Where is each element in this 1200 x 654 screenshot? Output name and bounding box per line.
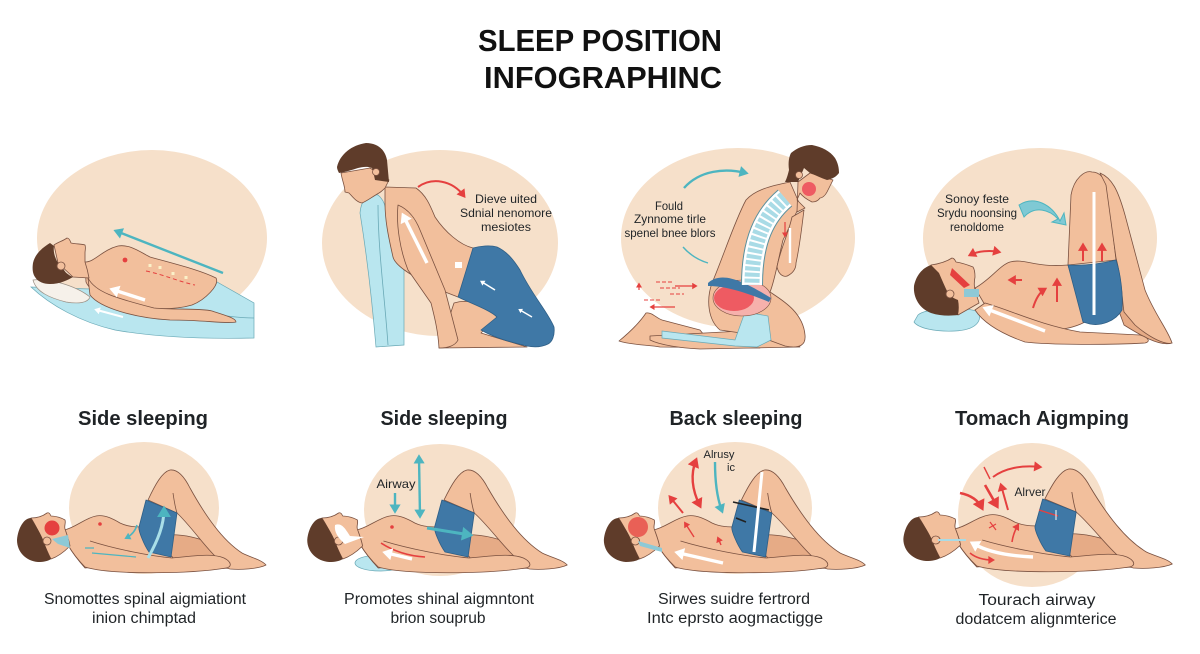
label: airway: Alrver [1014,485,1046,499]
caption 1: inion chimptad [92,610,196,627]
panel: bottom illustration 4 [903,443,1172,587]
heading: side sleeping 1: Side sleeping [78,408,208,430]
label: spinal note [460,192,552,234]
arrow: red curve [418,181,464,196]
label: spinal note: Fould [655,199,683,213]
caption 4: Tourach airway [978,592,1096,609]
panel: bottom illustration 2 [307,444,567,576]
title: INFOGRAPHINC [484,60,722,95]
arrows: red [670,460,721,545]
arrow: teal curves [684,171,746,188]
caption 2 [344,591,535,627]
heading: stomach: Tomach Aigmping [955,408,1129,430]
arrows: red [970,245,1102,308]
arrow: teal up-back [116,231,223,273]
label: airway: Airway [376,477,416,491]
caption 4: dodatcem alignmterice [956,611,1116,628]
arrow: white shoulder [987,309,1045,331]
title [478,23,722,95]
panel: bottom illustration 1 [17,442,266,574]
caption 3: Intc eprsto aogmactigge [647,610,823,627]
title: SLEEP POSITION [478,23,722,58]
caption 2: Promotes shinal aigmntont [344,591,535,608]
arrow: white torso [404,217,427,263]
label: spinal note: renoldome [950,220,1004,234]
caption 3: Sirwes suidre fertrord [658,591,810,608]
caption 3 [647,591,823,627]
label: spinal note: spenel bnee blors [624,226,716,240]
label: spinal note [624,199,716,240]
label: spinal note: Dieve uited [475,192,537,206]
panel: top illustration 2, leaning on board [322,143,558,348]
arrow: white [679,553,723,563]
arrow: white [974,544,1033,557]
caption 2: brion souprub [390,610,486,627]
panel: top illustration 3, kneeling with spine [619,145,855,349]
caption 4 [956,592,1116,628]
label: spinal note: Sdnial nenomore [460,206,552,220]
label: spinal note [937,192,1017,234]
arrow: white arm [114,290,145,300]
label: spinal note: Sonoy feste [945,192,1009,206]
arrows: small red [639,282,696,307]
label: airway: Alrusy [704,449,735,461]
label: spinal note: Zynnome tirle [634,212,706,226]
arrow: teal [715,462,722,511]
arrows: red [960,466,1040,560]
label: airway: ic [727,462,735,474]
panel: top illustration 1, lying on mat [31,150,267,338]
heading: side sleeping 2: Side sleeping [380,408,508,430]
arrows: teal [419,457,420,516]
arrow: teal on shorts [148,509,164,558]
arrow: teal curve [1019,201,1066,225]
heading: back sleeping: Back sleeping [670,408,802,430]
label: airway [704,449,735,474]
panel: bottom illustration 3 [604,442,865,574]
label: spinal note: Srydu noonsing [937,206,1017,220]
caption 1: Snomottes spinal aigmiationt [44,591,247,608]
label: spinal note: mesiotes [481,220,531,234]
panel: top illustration 4, back with raised knee [914,148,1172,344]
caption 1 [44,591,247,627]
